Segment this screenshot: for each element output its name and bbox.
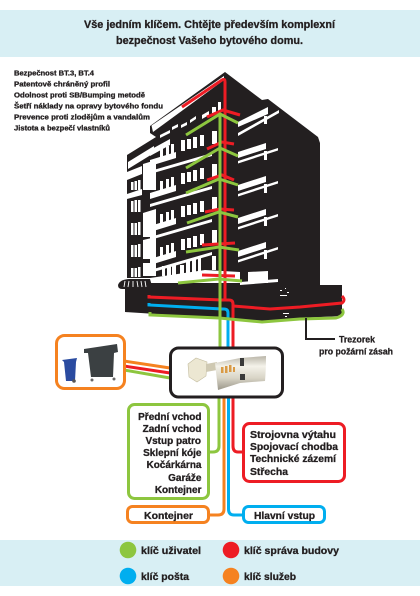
panel: service key location: Kontejner (144, 511, 193, 522)
panel: user key locations: Kontejner (155, 485, 202, 496)
key blade (206, 362, 217, 372)
orange line to service box (208, 396, 224, 515)
title: bezpečnost Vašeho bytového domu. (116, 35, 303, 47)
panel: user key locations: Sklepní kóje (143, 448, 202, 459)
feature list: Odolnost proti SB/Bumping metodě (14, 90, 145, 100)
legend (0, 540, 420, 586)
panel: management key locations: Strojovna výtahu (250, 430, 336, 441)
feature list: Patentově chráněný profil (14, 80, 110, 88)
panel: user key locations: Zadní vchod (143, 424, 202, 435)
panel: user key locations (128, 404, 208, 498)
key head (188, 358, 207, 382)
legend: building management key: klíč správa budovy (244, 546, 339, 557)
podium specks (280, 288, 289, 317)
legend: postal key (120, 568, 189, 584)
title: Vše jedním klíčem. Chtějte především komplexní (84, 19, 336, 31)
icon: dark container (84, 344, 118, 382)
feature list: Prevence proti zlodějům a vandalům (14, 112, 150, 122)
ground floor band (127, 270, 240, 283)
waste line connectors (124, 361, 170, 378)
legend: user key (120, 542, 201, 558)
panel: postal key location (244, 506, 324, 522)
green line to user box (208, 396, 219, 452)
cylinder cam (240, 358, 245, 380)
red network on building (149, 79, 344, 348)
safe callout (306, 318, 393, 356)
safe callout: pro požární zásah (319, 346, 393, 356)
feature list: Jistota a bezpečí vlastníků (14, 124, 110, 132)
lines below key box (208, 396, 244, 515)
legend: building management key (223, 542, 339, 558)
title (84, 19, 336, 47)
panel: management key locations: Střecha (250, 467, 288, 478)
top floors (127, 102, 279, 285)
legend: postal key: klíč pošta (141, 572, 189, 583)
legend: service key (223, 568, 296, 584)
panel: postal key location: Hlavní vstup (254, 511, 315, 522)
header band (0, 10, 420, 57)
panel: user key locations: Kočárkárna (146, 460, 202, 471)
blue line to main entrance (228, 396, 244, 515)
panel: management key locations (244, 424, 344, 482)
cylinder body (215, 356, 266, 390)
icon: blue bin (62, 358, 77, 383)
feature list: Bezpečnost BT.3, BT.4 (14, 68, 95, 78)
panel: management key locations: Technické zázemí (250, 454, 337, 465)
panel: user key locations: Garáže (168, 473, 202, 484)
panel: user key locations: Přední vchod (138, 412, 202, 423)
legend: user key: klíč uživatel (141, 546, 201, 557)
legend: service key: klíč služeb (244, 572, 296, 583)
panel: user key locations: Vstup patro (145, 436, 201, 447)
feature list: Šetří náklady na opravy bytového fondu (14, 102, 163, 110)
blue network on building (149, 303, 228, 348)
panel: management key locations: Spojovací chodba (250, 442, 338, 453)
panel: waste containers (56, 336, 124, 388)
cylinder pins (221, 365, 235, 373)
building (118, 72, 342, 322)
roof strip (152, 76, 224, 132)
red line to management box (233, 396, 244, 452)
safe callout: Trezorek (339, 334, 376, 344)
canopy (118, 279, 152, 289)
panel: key and cylinder (170, 348, 282, 397)
panel: service key location (128, 506, 208, 522)
feature list (14, 68, 163, 132)
green network on building (150, 113, 343, 348)
